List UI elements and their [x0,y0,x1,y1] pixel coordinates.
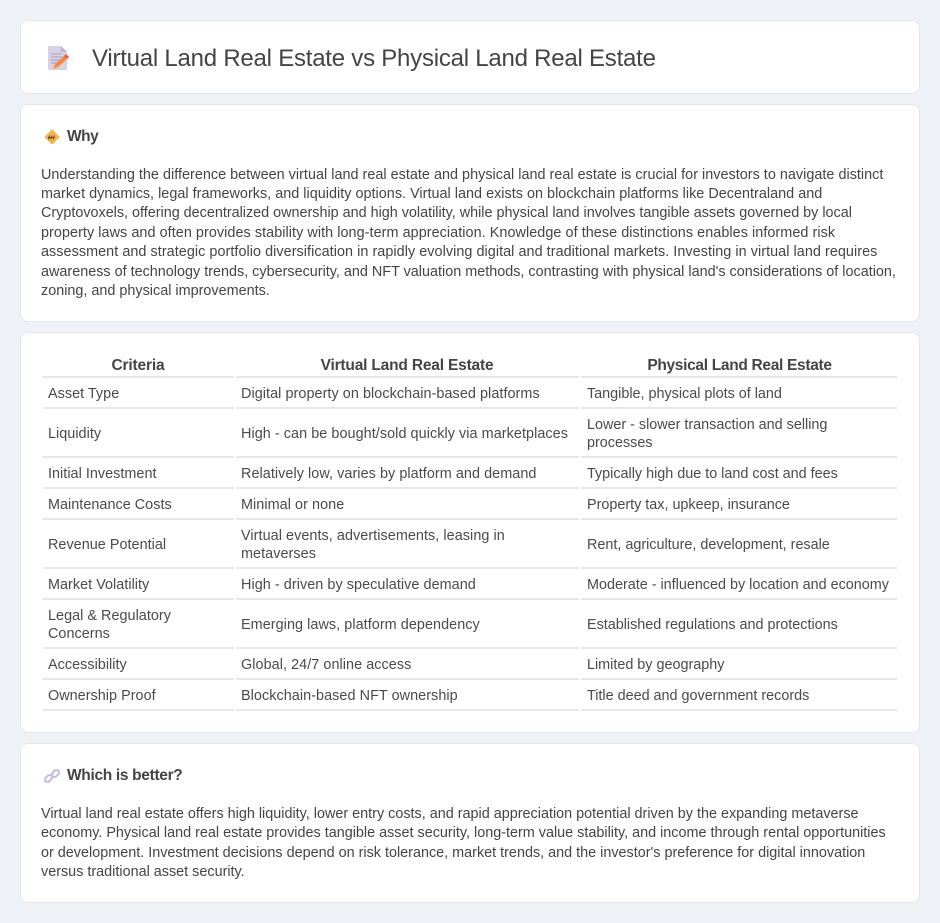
table: Liquidity [48,426,101,442]
table: Tangible, physical plots of land [587,386,782,402]
table: Accessibility [48,657,127,673]
text block: which is better [41,806,886,880]
table: Concerns [48,626,110,642]
table: Maintenance Costs [48,497,172,513]
table: processes [587,435,652,451]
table: Lower - slower transaction and selling [587,417,827,433]
text block: which is better: Virtual land real estate offers high liquidity, lower entry costs, and rapid appreciation potential driven by the expanding metaverse [41,806,859,822]
table: Emerging laws, platform dependency [241,617,480,633]
text block: why: assessment and strategic portfolio diversification in rapidly evolving digital and traditional markets. Investing in virtual land requires [41,244,877,260]
table: Title deed and government records [587,688,809,704]
table: Established regulations and protections [587,617,838,633]
table: Asset Type [48,386,119,402]
table: Moderate - influenced by location and economy [587,577,889,593]
table: Blockchain-based NFT ownership [241,688,458,704]
text block: why: market dynamics, legal frameworks, and liquidity options. Virtual land exists on blockchain platforms like Decentraland and [41,186,822,202]
heading: which is better: Which is better? [67,767,182,784]
table [43,357,897,711]
table: Global, 24/7 online access [241,657,411,673]
panel: which is better [20,743,920,903]
panel: comparison table [20,332,920,733]
text block: why: Cryptovoxels, offering decentralized ownership and high volatility, while physical land involves tangible assets governed by local [41,205,852,221]
text block: why: awareness of technology trends, cybersecurity, and NFT valuation methods, contrasting with physical land's considerations of location, [41,264,896,280]
table: Property tax, upkeep, insurance [587,497,790,513]
text block: which is better: versus traditional asset security. [41,864,245,880]
panel: why [20,104,920,322]
header panel [20,20,920,94]
table: Rent, agriculture, development, resale [587,537,830,553]
table: Typically high due to land cost and fees [587,466,838,482]
table: Market Volatility [48,577,149,593]
table: Revenue Potential [48,537,166,553]
table: Minimal or none [241,497,344,513]
table: Virtual Land Real Estate [321,357,493,374]
text block: why: zoning, and physical improvements. [41,283,270,299]
table: High - driven by speculative demand [241,577,476,593]
table: Relatively low, varies by platform and demand [241,466,536,482]
icon: diamond sign [44,130,60,144]
table: Virtual events, advertisements, leasing in [241,528,505,544]
text block: which is better: economy. Physical land real estate provides tangible asset security, long-term value stability, and income through rental opportunities [41,825,886,841]
table: Initial Investment [48,466,157,482]
text block: why [41,166,896,299]
table: Physical Land Real Estate [647,357,832,374]
table: metaverses [241,546,316,562]
table: High - can be bought/sold quickly via marketplaces [241,426,568,442]
title: Virtual Land Real Estate vs Physical Land Real Estate [92,45,656,72]
text block: which is better: or development. Investment decisions depend on risk tolerance, market trends, and the investor's preference for digital innovation [41,845,865,861]
icon: document with pencil [48,46,69,70]
icon: chain link [44,768,60,784]
table: Ownership Proof [48,688,156,704]
table: Limited by geography [587,657,724,673]
heading: why: Why [67,128,98,145]
table: Digital property on blockchain-based platforms [241,386,540,402]
text block: why: Understanding the difference between virtual land real estate and physical land real estate is crucial for investors to navigate distinct [41,166,883,182]
table: Criteria [111,357,165,374]
text block: why: property laws and often provides stability with long-term appreciation. Knowledge of these distinctions enables informed risk [41,225,835,241]
table: Legal & Regulatory [48,608,171,624]
